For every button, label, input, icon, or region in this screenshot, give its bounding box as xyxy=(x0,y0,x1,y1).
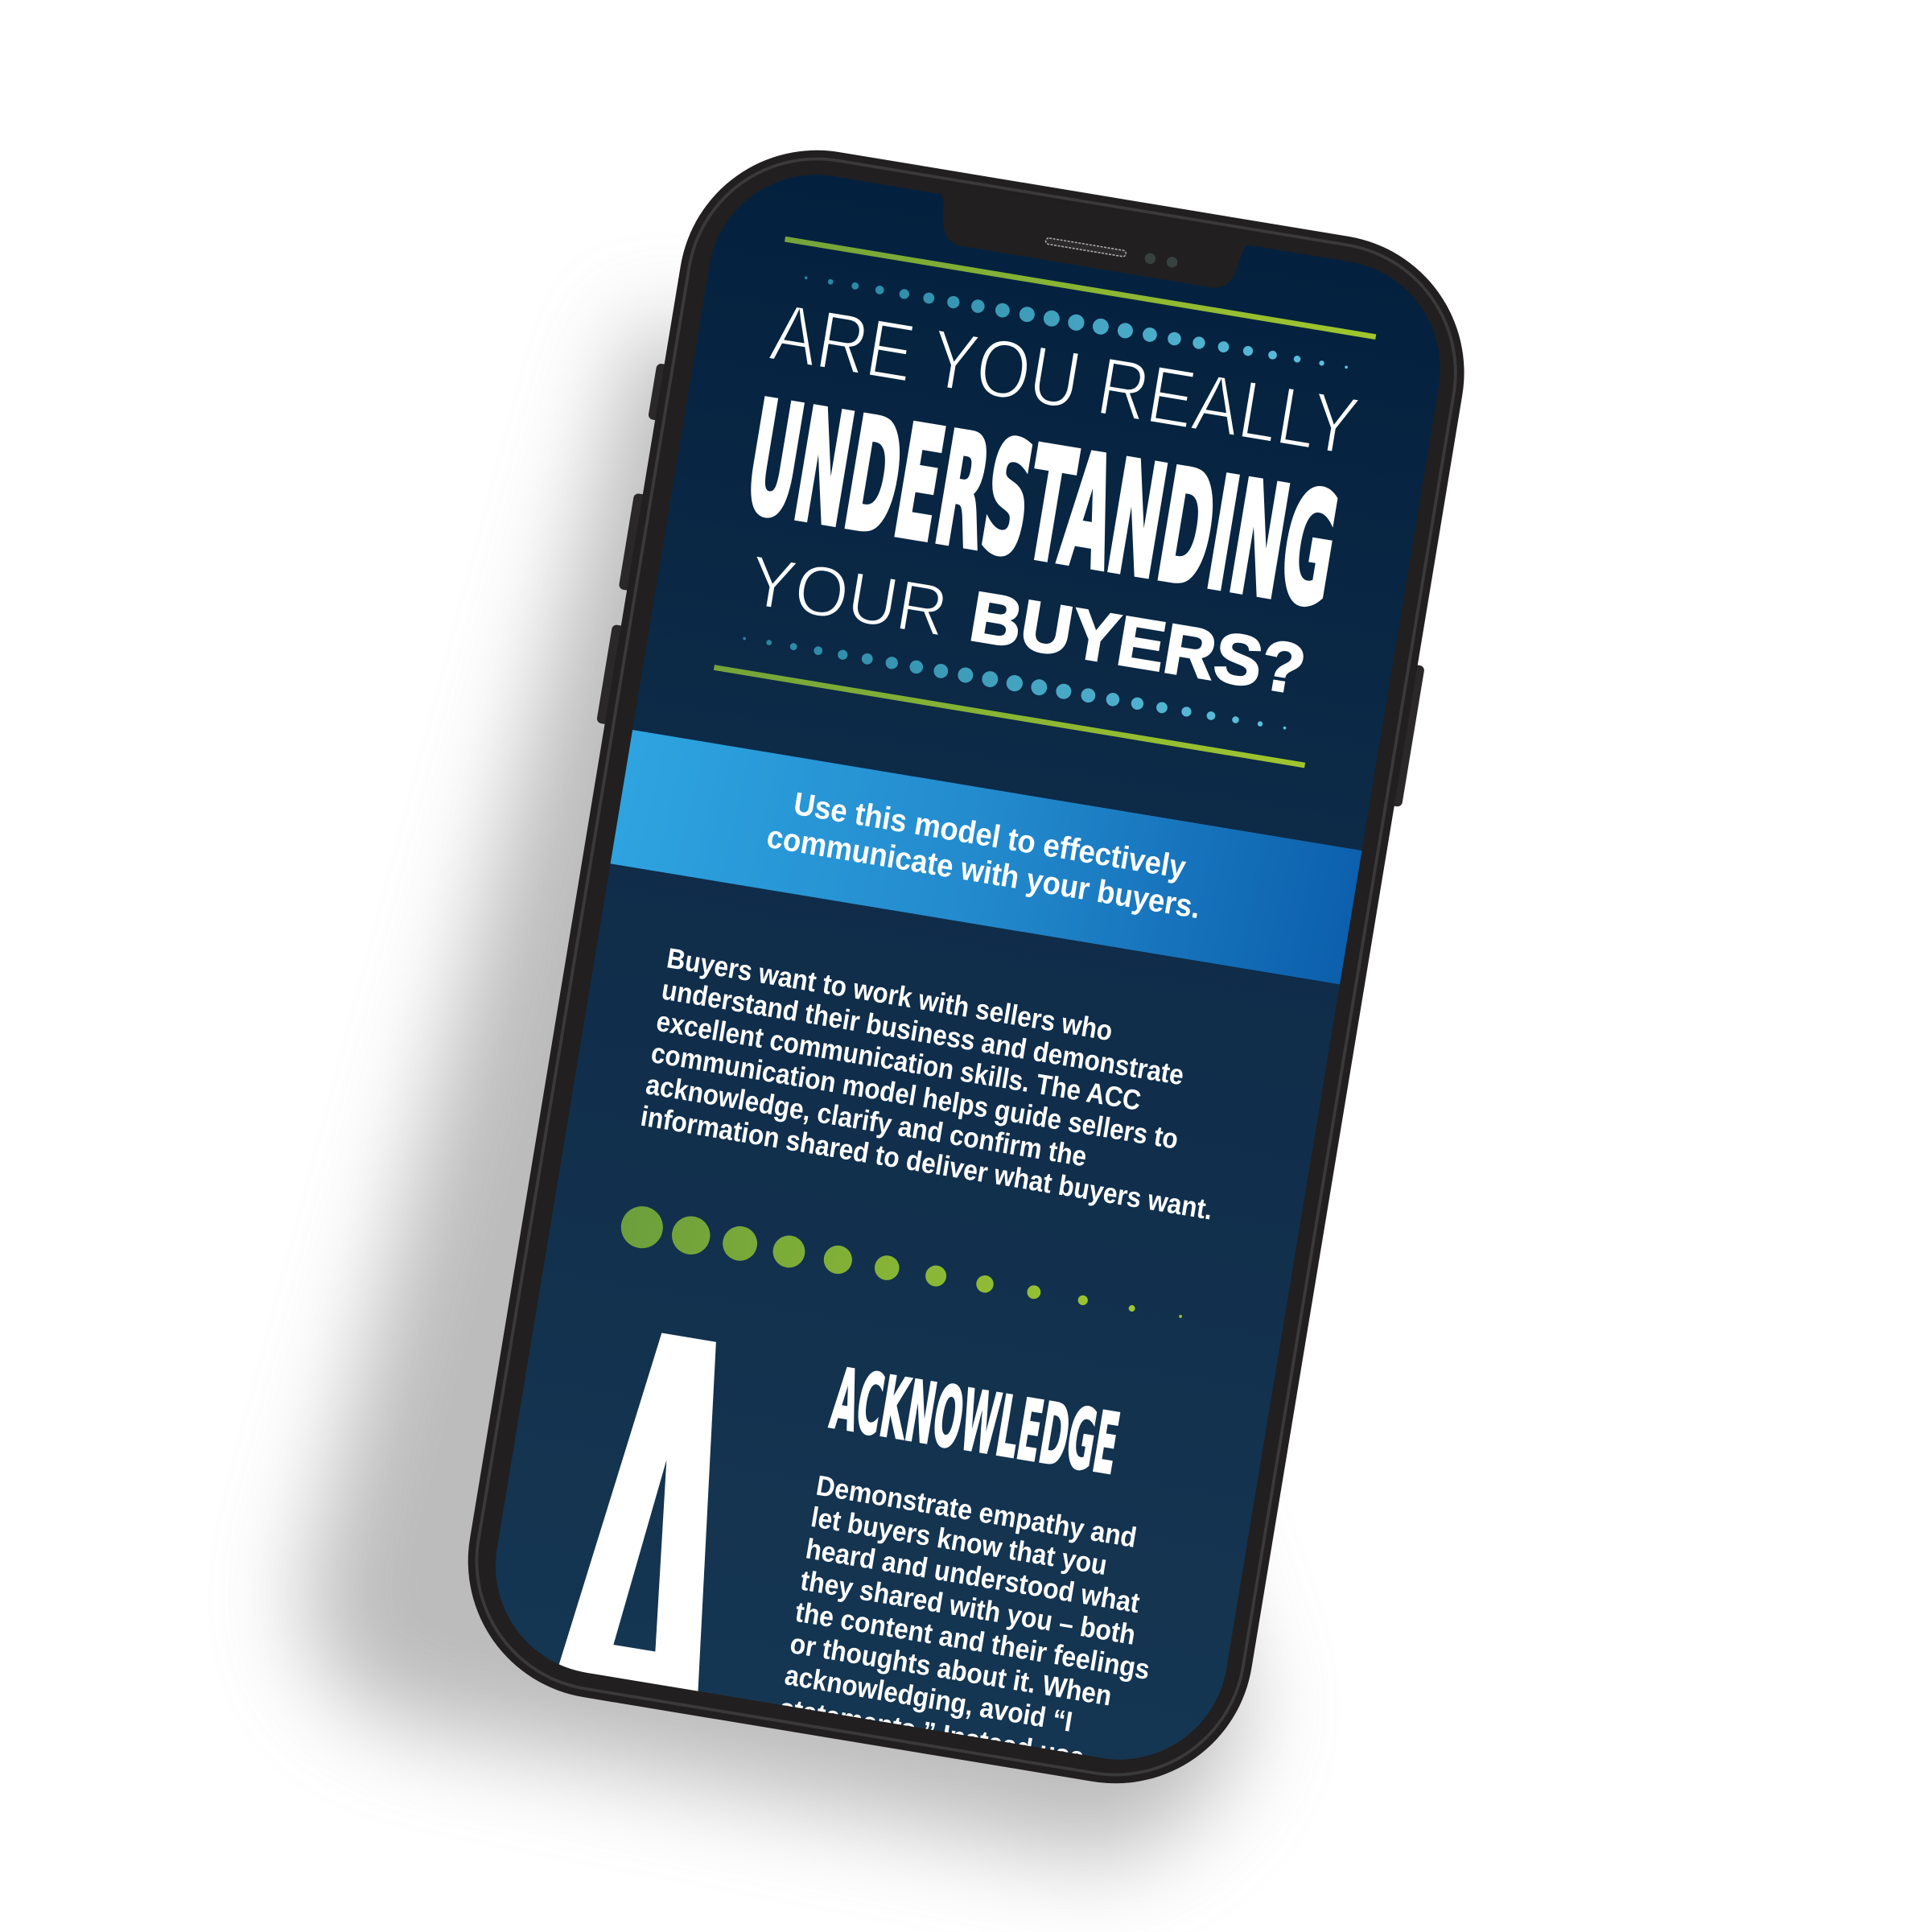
drop shadow xyxy=(307,320,1245,1860)
top blue dotted row xyxy=(805,276,1348,369)
banner background xyxy=(595,727,1373,987)
screen: ACKNOWLEDGE xyxy=(825,1349,1126,1493)
blue banner xyxy=(595,727,1373,987)
acknowledge body text: Demonstrate empathy and xyxy=(814,1470,1139,1554)
side button: volume down xyxy=(596,624,631,726)
screen background xyxy=(476,158,1460,1777)
lower green rule xyxy=(714,665,1305,768)
acknowledge body text: heard and understood what xyxy=(804,1533,1142,1619)
intro paragraph: excellent communication skills. The ACC xyxy=(654,1006,1143,1117)
front camera xyxy=(1144,253,1156,265)
screen xyxy=(459,156,1468,1801)
title line: are you really: ARE YOU REALLY xyxy=(764,285,1365,473)
phone inner rim xyxy=(457,139,1475,1794)
title line: buyers: BUYERS? xyxy=(965,577,1311,710)
acknowledge body text: let buyers know that you xyxy=(809,1502,1110,1581)
notch xyxy=(927,181,1255,293)
speaker grille xyxy=(1045,237,1127,257)
acknowledge body text: they shared with you – both xyxy=(798,1565,1138,1651)
banner text: Use this model to effectively xyxy=(791,786,1188,886)
phone body xyxy=(447,130,1485,1804)
phone mockup xyxy=(439,128,1492,1805)
acknowledge body text: statements.” Instead use xyxy=(777,1692,1086,1773)
big letter A xyxy=(551,1324,757,1715)
green dotted row xyxy=(618,1203,1185,1337)
title line: your: YOUR xyxy=(744,540,954,652)
intro paragraph xyxy=(638,942,1241,1226)
lower blue dotted row xyxy=(743,637,1286,729)
intro paragraph: understand their business and demonstrate xyxy=(660,974,1186,1091)
intro paragraph: Buyers want to work with sellers who xyxy=(665,942,1114,1047)
notch shape xyxy=(927,181,1255,293)
banner text: communicate with your buyers. xyxy=(764,819,1203,925)
intro paragraph: information shared to deliver what buyers want. xyxy=(638,1101,1215,1226)
acknowledge body text: the content and their feelings xyxy=(793,1596,1152,1686)
banner text xyxy=(764,783,1209,925)
side button: volume up xyxy=(619,493,653,592)
acknowledge body text xyxy=(777,1470,1173,1782)
intro paragraph: acknowledge, clarify and confirm the xyxy=(644,1069,1089,1172)
acknowledge body text: or thoughts about it. When xyxy=(788,1628,1114,1712)
side button: mute switch xyxy=(648,363,674,422)
top green rule xyxy=(785,237,1376,340)
side button: power xyxy=(1383,663,1425,807)
acknowledge body text: acknowledging, avoid “I xyxy=(783,1659,1074,1738)
front sensor xyxy=(1166,256,1178,269)
intro paragraph: communication model helps guide sellers to xyxy=(649,1037,1180,1155)
